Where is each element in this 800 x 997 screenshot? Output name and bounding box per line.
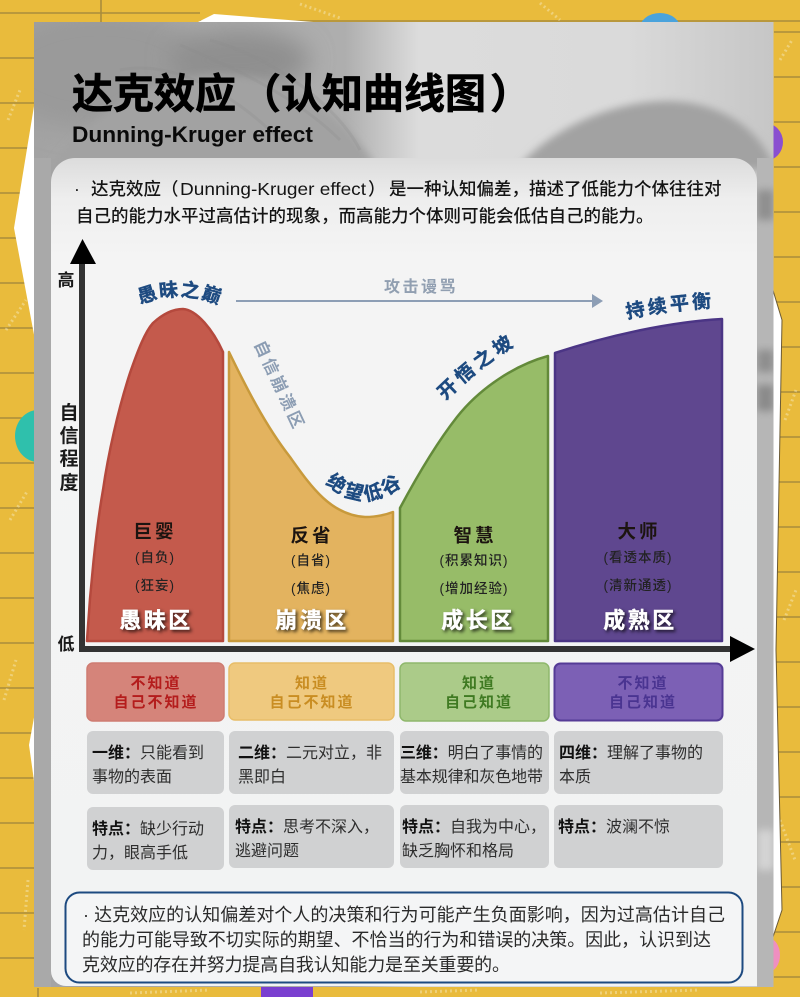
title xyxy=(72,60,531,120)
card: two dimensions: 二维：二元对立，非 xyxy=(238,743,382,762)
card: four dimensions: 本质 xyxy=(559,768,591,786)
tag: orange: 知道 xyxy=(295,674,329,692)
intro text block: 是一种认知偏差，描述了低能力个体往往对 xyxy=(389,179,722,199)
intro text block: · xyxy=(74,179,80,199)
subtitle: Dunning-Kruger effect xyxy=(72,122,314,147)
zone: red ignorance area: (狂妄) xyxy=(135,577,175,593)
tag: purple: 自己知道 xyxy=(609,693,677,711)
row: trait cards xyxy=(87,805,723,870)
y axis arrow xyxy=(70,239,96,652)
chart: Dunning-Kruger curve xyxy=(58,239,755,662)
tag: green xyxy=(400,663,549,721)
tag: purple: 不知道 xyxy=(617,674,669,692)
tag: red: 自己不知道 xyxy=(113,693,199,711)
card: trait purple: 特点：波澜不惊 xyxy=(558,817,670,836)
y axis labels xyxy=(58,270,79,654)
tag: green: 自己知道 xyxy=(445,693,513,711)
zone: orange collapse area: (自省) xyxy=(291,553,331,568)
y axis labels: 度 xyxy=(59,471,79,494)
zone: purple mature area: (清新通透) xyxy=(604,578,672,593)
card: trait red xyxy=(87,807,224,870)
card: trait orange xyxy=(229,805,394,868)
tag: red xyxy=(87,663,224,721)
intro text block: 自己的能力水平过高估计的现象，而高能力个体则可能会低估自己的能力。 xyxy=(76,206,654,226)
tag: orange: 自己不知道 xyxy=(269,693,355,711)
callout: conclusion box: 克效应的存在并努力提高自我认知能力是至关重要的。 xyxy=(82,955,510,975)
zone: orange collapse area xyxy=(229,352,393,641)
zone: green growth area: 智慧 xyxy=(453,525,497,546)
intro text block: （ xyxy=(161,179,178,199)
card: one dimension xyxy=(87,731,224,794)
zone: purple mature area: (看透本质) xyxy=(604,550,672,565)
zone: green growth area: (积累知识) xyxy=(440,552,508,568)
arrow: attack and abuse xyxy=(236,277,603,308)
arrow: attack and abuse: 攻击谩骂 xyxy=(384,277,458,296)
card: one dimension: 事物的表面 xyxy=(92,768,172,786)
card: trait purple xyxy=(554,805,723,868)
zone: purple mature area: 成熟区 xyxy=(603,608,677,633)
zone: red ignorance area xyxy=(87,309,223,641)
zone: orange collapse area: 反省 xyxy=(290,525,334,546)
callout: conclusion box xyxy=(66,892,742,982)
card: four dimensions xyxy=(554,731,723,794)
y axis labels: 自 xyxy=(59,402,79,424)
card: one dimension: 一维：只能看到 xyxy=(92,743,204,762)
card: four dimensions: 四维：理解了事物的 xyxy=(559,743,703,762)
title: ） xyxy=(490,60,531,120)
card: two dimensions xyxy=(229,731,394,794)
zone: purple mature area: 大师 xyxy=(617,521,661,542)
y axis labels: 程 xyxy=(59,448,79,470)
card: three dimensions: 三维：明白了事情的 xyxy=(400,743,543,762)
card: trait orange: 逃避问题 xyxy=(235,842,299,860)
callout: conclusion box: · 达克效应的认知偏差对个人的决策和行为可能产生负面影响，因为过高估计自己 xyxy=(83,905,725,925)
row: awareness tags xyxy=(87,663,722,721)
zone: green growth area xyxy=(400,356,548,641)
tag: red: 不知道 xyxy=(130,674,182,692)
tag: green: 知道 xyxy=(462,674,496,692)
card: two dimensions: 黑即白 xyxy=(238,768,286,786)
title: 认知曲线图 xyxy=(281,60,486,120)
white content card xyxy=(51,158,757,986)
y axis labels: 低 xyxy=(58,635,74,654)
curve label: slope of enlightenment: 开悟之坡 xyxy=(436,334,514,400)
x axis arrow xyxy=(79,636,755,662)
callout: conclusion box: 的能力可能导致不切实际的期望、不恰当的行为和错误的决策。因此，认识到达 xyxy=(82,930,711,950)
intro text block: 达克效应 xyxy=(91,179,161,199)
zone: orange collapse area: (焦虑) xyxy=(291,580,331,596)
tag: purple xyxy=(554,664,722,720)
zone: red ignorance area: 愚昧区 xyxy=(119,608,193,633)
y axis labels: 信 xyxy=(59,425,79,447)
intro text block: ） xyxy=(368,179,386,199)
intro text block: Dunning-Kruger effect xyxy=(180,179,366,199)
zone: red ignorance area: 巨婴 xyxy=(133,521,177,542)
card: trait green: 特点：自我为中心， xyxy=(402,817,546,836)
zone: purple mature area xyxy=(555,319,722,641)
card: trait red: 力，眼高手低 xyxy=(92,844,188,862)
card: trait green xyxy=(400,805,549,868)
card: three dimensions: 基本规律和灰色地带 xyxy=(400,768,543,786)
intro text block xyxy=(74,179,722,226)
card: trait green: 缺乏胸怀和格局 xyxy=(402,842,514,860)
curve label: confidence collapse: 自信崩溃区 xyxy=(254,341,306,430)
card: trait red: 特点：缺少行动 xyxy=(92,819,204,838)
card: trait orange: 特点：思考不深入， xyxy=(235,817,379,836)
y axis labels: 高 xyxy=(58,270,74,290)
title: 达克效应 xyxy=(72,60,236,120)
zone: red ignorance area: (自负) xyxy=(135,550,175,565)
zone: orange collapse area: 崩溃区 xyxy=(275,608,349,633)
curve label: valley of despair: 绝望低谷 xyxy=(325,472,400,502)
card: three dimensions xyxy=(400,731,549,794)
row: dimension cards xyxy=(87,731,723,794)
zone: green growth area: 成长区 xyxy=(441,608,515,633)
tag: orange xyxy=(229,663,394,720)
curve label: sustained balance: 持续平衡 xyxy=(625,292,710,320)
title: （ xyxy=(240,60,281,120)
zone: green growth area: (增加经验) xyxy=(440,580,508,596)
curve label: peak of ignorance: 愚昧之巅 xyxy=(138,280,222,306)
